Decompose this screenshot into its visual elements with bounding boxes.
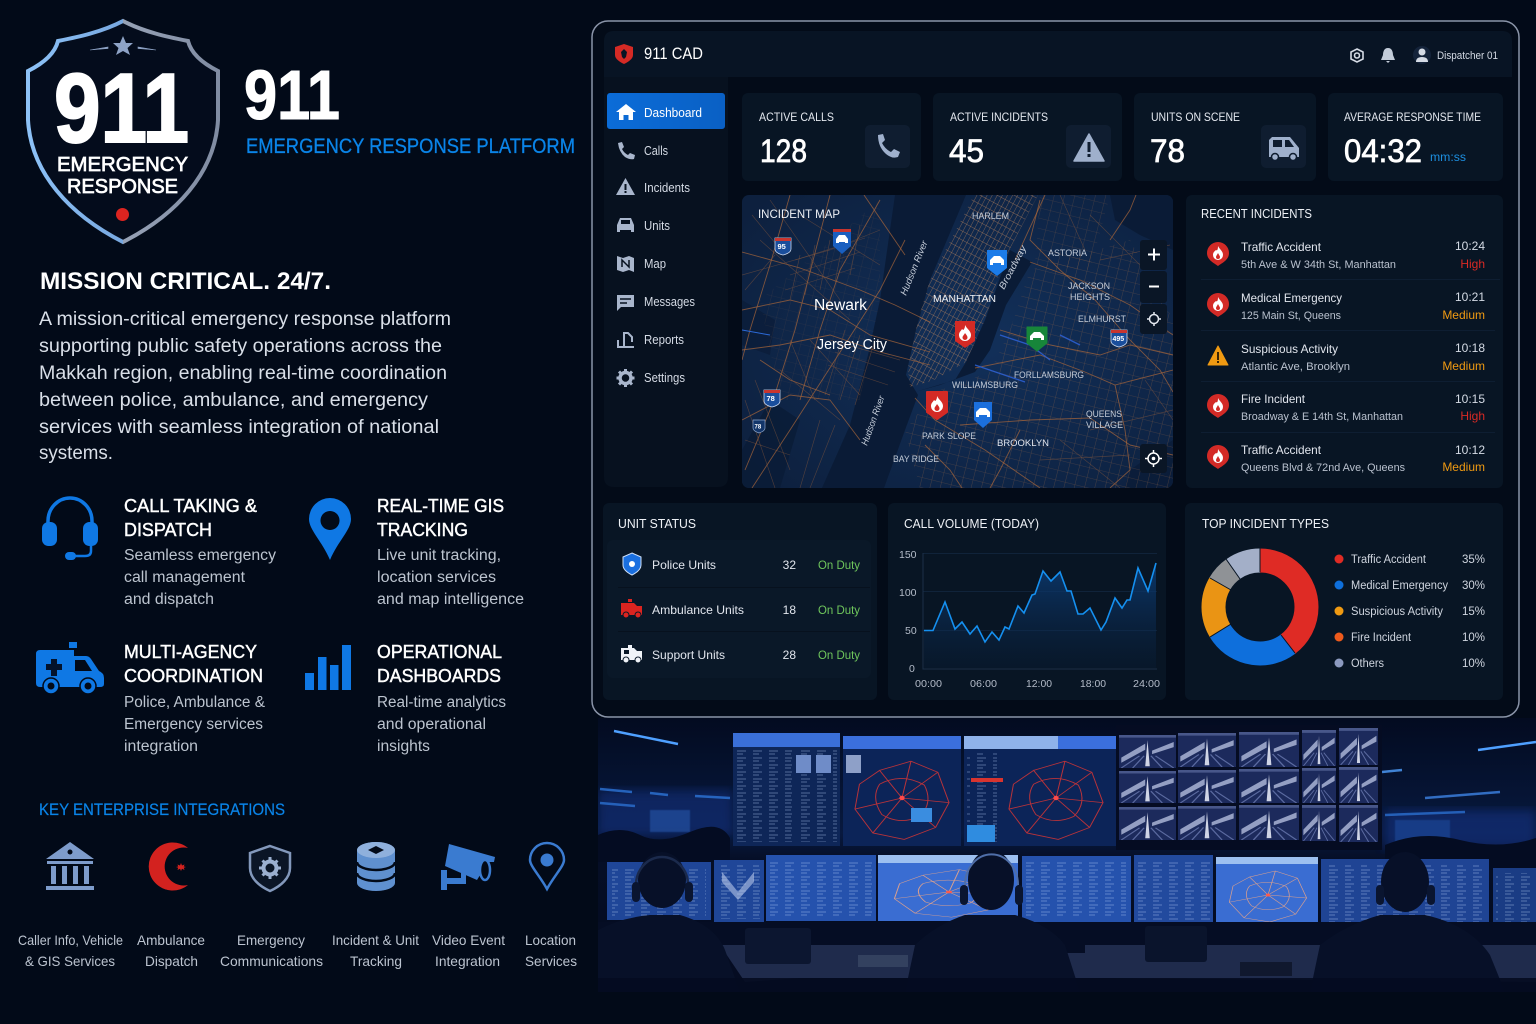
incident row: medical emergency, medium: 125 Main St, Queens (1241, 310, 1341, 322)
incident row: fire incident, high: Broadway & E 14th St, Manhattan (1241, 411, 1403, 423)
logo badge: 911 emergency response shield (28, 21, 218, 242)
mission description text block: systems. (39, 443, 113, 464)
unit row: support: Support Units (652, 648, 725, 662)
map locate button (1140, 444, 1167, 473)
unit row: ambulance (621, 599, 860, 618)
map pin: vehicle blue north (987, 250, 1007, 276)
KPI card: average response time: 04:32 (1344, 133, 1422, 169)
chart axis labels: 100 (899, 587, 917, 599)
dashboard header bar (604, 31, 1512, 77)
map place labels: ELMHURST (1078, 314, 1126, 325)
nav item: dashboard: Dashboard (644, 106, 702, 120)
mission description text block: Makkah region, enabling real-time coordination (39, 363, 447, 384)
unit row: support: On Duty (818, 650, 860, 662)
chart axis labels: 24:00 (1133, 678, 1160, 690)
incident row: fire incident, high: 10:15 (1455, 392, 1485, 406)
map pin: fire red south (927, 392, 947, 419)
map place labels: BROOKLYN (997, 438, 1049, 449)
map pin: police blue (833, 229, 851, 254)
icon: notification bell (1381, 48, 1395, 63)
unit row: police: On Duty (818, 560, 860, 572)
map place labels: Newark (814, 297, 867, 314)
nav item: reports (618, 333, 684, 347)
map place labels: HARLEM (972, 211, 1009, 222)
feature: multi-agency coordination: Emergency services (124, 716, 263, 733)
panel: incident map (742, 195, 1173, 488)
chart area fill (924, 563, 1156, 668)
title: 911: 911 (244, 56, 340, 134)
dashboard header bar: Dispatcher 01 (1437, 50, 1498, 62)
panel: call volume line chart (888, 503, 1166, 700)
mission description text block: supporting public safety operations across the (39, 336, 442, 357)
feature: multi-agency coordination: COORDINATION (124, 666, 263, 686)
feature: operational dashboards (305, 642, 506, 755)
donut legend: Suspicious Activity (1351, 606, 1443, 618)
KPI card: units on scene: 78 (1150, 133, 1185, 169)
KPI card: active incidents: ACTIVE INCIDENTS (950, 110, 1048, 124)
panel: call volume line chart: CALL VOLUME (TODAY) (904, 517, 1039, 531)
incident row: traffic accident, medium: 10:12 (1455, 443, 1485, 457)
map title: INCIDENT MAP (758, 207, 840, 221)
map place labels: ASTORIA (1048, 248, 1088, 259)
incident row: suspicious activity, medium: Atlantic Ave, Brooklyn (1241, 361, 1350, 373)
donut legend: Medical Emergency (1351, 580, 1448, 592)
incident row: fire incident, high: Fire Incident (1241, 392, 1306, 406)
KPI card: units on scene: UNITS ON SCENE (1151, 110, 1240, 124)
integration: video event integration: Video Event (432, 932, 505, 948)
nav item: units (617, 218, 670, 233)
integration: emergency communications: Emergency (237, 932, 305, 948)
KPI card: average response time (1328, 93, 1503, 181)
donut legend (1334, 554, 1485, 670)
map place labels: FORLLAMSBURG (1014, 370, 1084, 381)
feature: multi-agency coordination: Police, Ambulance & (124, 694, 266, 711)
nav item: map: Map (644, 257, 666, 271)
chart axis labels: 50 (905, 625, 917, 637)
map city grids (760, 195, 1173, 488)
KPI card: units on scene (1134, 93, 1316, 181)
unit row: police: Police Units (652, 558, 716, 572)
icon: red crescent (149, 843, 188, 890)
panel: 911 CAD dashboard (592, 21, 1519, 717)
incident row: suspicious activity, medium (1208, 341, 1485, 373)
heading: mission critical: MISSION CRITICAL. 24/7. (40, 268, 331, 295)
map pin: green unit (1027, 327, 1047, 351)
incident row: medical emergency, medium: Medium (1442, 308, 1485, 322)
map highway shields: 78 (754, 424, 762, 430)
subtitle: emergency response platform: EMERGENCY RESPONSE PLATFORM (246, 135, 575, 158)
incident row: traffic accident, medium: Traffic Accident (1241, 443, 1322, 457)
integration: caller info, vehicle and GIS services: Caller Info, Vehicle (18, 932, 123, 948)
feature: call taking and dispatch: DISPATCH (124, 520, 212, 540)
KPI card: active calls: ACTIVE CALLS (759, 110, 834, 124)
nav item: settings (616, 369, 685, 387)
integration: video event integration (432, 844, 505, 969)
icon: red shield logo (615, 44, 633, 64)
operator: left (623, 856, 727, 955)
chart axis labels: 06:00 (970, 678, 997, 690)
KPI card: active calls (742, 93, 921, 181)
incident row: suspicious activity, medium: Suspicious Activity (1241, 342, 1338, 356)
logo badge: 911 emergency response shield: RESPONSE (67, 176, 178, 198)
unit row: ambulance: 18 (783, 603, 796, 617)
feature: multi-agency coordination: MULTI-AGENCY (124, 642, 257, 662)
map place labels: JACKSON (1068, 281, 1110, 292)
feature: real-time GIS tracking: and map intelligence (377, 591, 524, 608)
icon: dispatcher avatar (1413, 46, 1431, 64)
KPI card: average response time: AVERAGE RESPONSE TIME (1344, 110, 1481, 124)
panel: unit status: UNIT STATUS (618, 517, 696, 531)
icon: shield with gear (250, 846, 290, 891)
map pin: vehicle blue south (974, 402, 992, 428)
incident row: traffic accident, medium (1207, 443, 1485, 474)
incident row: traffic accident, medium: Queens Blvd & 72nd Ave, Queens (1241, 462, 1405, 474)
mission description text block: services with seamless integration of national (39, 417, 439, 438)
KPI card: active incidents (933, 93, 1122, 181)
feature: real-time GIS tracking: Live unit tracking, (377, 547, 501, 564)
chart axis labels: 0 (909, 663, 915, 675)
map zoom controls (1140, 240, 1167, 334)
feature: real-time GIS tracking: REAL-TIME GIS (377, 496, 504, 516)
map place labels: Broadway (997, 243, 1030, 291)
desk monitors (607, 855, 1536, 922)
feature: multi-agency coordination: integration (124, 738, 198, 755)
icon: ambulance (36, 642, 104, 694)
unit row: police (623, 553, 860, 575)
incident row: fire incident, high: High (1460, 409, 1485, 423)
feature: operational dashboards: insights (377, 738, 430, 755)
operator: right (1313, 859, 1500, 978)
integration: emergency communications (220, 846, 323, 969)
nav item: units: Units (644, 219, 670, 233)
chart axis labels (899, 549, 1160, 690)
map place labels: HEIGHTS (1070, 292, 1110, 303)
feature: operational dashboards: DASHBOARDS (377, 666, 501, 686)
chart axis labels: 150 (899, 549, 917, 561)
incident row: fire incident, high (1207, 392, 1485, 423)
mission description text block (39, 309, 451, 464)
photo: control room with video wall and operators (598, 718, 1536, 992)
mission description text block: A mission-critical emergency response platform (39, 309, 451, 330)
feature: real-time GIS tracking: location services (377, 569, 496, 586)
map highway shields: 495 (1112, 336, 1124, 343)
integration: caller info, vehicle and GIS services: & GIS Services (25, 953, 115, 969)
donut legend: 15% (1462, 606, 1485, 618)
incident row: traffic accident, high: 5th Ave & W 34th St, Manhattan (1241, 259, 1396, 271)
unit row: support (621, 645, 860, 663)
incident row: traffic accident, high (1207, 239, 1485, 271)
feature: operational dashboards: Real-time analytics (377, 694, 506, 711)
feature: real-time GIS tracking (309, 496, 524, 608)
map place labels (814, 211, 1126, 465)
donut legend: 35% (1462, 554, 1485, 566)
integration: caller info, vehicle and GIS services (18, 842, 123, 969)
integration: location services (525, 843, 577, 969)
nav item: messages (617, 295, 695, 311)
incident row: suspicious activity, medium: Medium (1442, 359, 1485, 373)
incident row: medical emergency, medium: Medical Emergency (1241, 291, 1342, 305)
icon: map pin (309, 498, 351, 560)
feature: real-time GIS tracking: TRACKING (377, 520, 468, 540)
feature: call taking and dispatch: Seamless emergency (124, 547, 276, 564)
icon: outline location pin (530, 843, 564, 889)
map highway shields: 95 (778, 242, 786, 251)
feature: call taking and dispatch: and dispatch (124, 591, 214, 608)
unit row: police: 32 (783, 558, 796, 572)
feature: operational dashboards: OPERATIONAL (377, 642, 502, 662)
incident row: traffic accident, medium: Medium (1442, 460, 1485, 474)
nav item: calls (618, 142, 668, 159)
donut legend: Traffic Accident (1351, 554, 1427, 566)
nav item: dashboard (607, 93, 725, 129)
feature: call taking and dispatch: call management (124, 569, 246, 586)
nav item: reports: Reports (644, 333, 684, 347)
map place labels: WILLIAMSBURG (952, 380, 1018, 391)
desk and equipment (722, 922, 1536, 978)
donut legend: 10% (1462, 632, 1485, 644)
video wall: camera feeds (1116, 725, 1382, 850)
donut legend: Fire Incident (1351, 632, 1412, 644)
map place labels: Hudson River (899, 238, 931, 297)
map place labels: VILLAGE (1086, 420, 1123, 431)
KPI card: active incidents: 45 (949, 133, 984, 169)
nav item: map (617, 256, 666, 272)
map place labels: PARK SLOPE (922, 431, 976, 442)
feature: operational dashboards: and operational (377, 716, 486, 733)
map place labels: Hudson River (859, 394, 888, 447)
panel: recent incidents: RECENT INCIDENTS (1201, 207, 1312, 221)
heading: key enterprise integrations: KEY ENTERPRISE INTEGRATIONS (39, 801, 285, 819)
unit row: support: 28 (783, 648, 796, 662)
sidebar navigation (604, 77, 728, 487)
map place labels: QUEENS (1086, 409, 1122, 420)
operator: center (908, 853, 1076, 978)
icon: settings badge (1351, 49, 1363, 62)
donut legend: 30% (1462, 580, 1485, 592)
nav item: calls: Calls (644, 144, 668, 158)
map pin: fire red north (955, 321, 975, 348)
donut chart (1195, 542, 1325, 672)
logo badge: 911 emergency response shield: 911 (54, 53, 189, 163)
map place labels: Jersey City (817, 337, 888, 353)
KPI card: active calls: 128 (760, 133, 807, 169)
background office lights (598, 731, 1536, 870)
incident row: medical emergency, medium: 10:21 (1455, 290, 1485, 304)
dashboard header bar: 911 CAD (644, 45, 703, 63)
integration: ambulance dispatch: Dispatch (145, 953, 198, 969)
logo badge: 911 emergency response shield: EMERGENCY (57, 154, 188, 176)
KPI card: average response time: mm:ss (1430, 150, 1466, 164)
map water (742, 195, 1173, 488)
incident row: traffic accident, high: 10:24 (1455, 239, 1485, 253)
nav item: messages: Messages (644, 295, 695, 309)
integration: incident and unit tracking: Tracking (350, 953, 402, 969)
feature: multi-agency coordination (36, 642, 266, 755)
nav item: incidents: Incidents (644, 181, 690, 195)
integration: emergency communications: Communications (220, 953, 323, 969)
chart axis labels: 18:00 (1080, 678, 1106, 690)
integration: location services: Location (525, 932, 576, 948)
incident row: traffic accident, high: Traffic Accident (1241, 240, 1322, 254)
integration: location services: Services (525, 953, 577, 969)
integration: ambulance dispatch: Ambulance (137, 932, 205, 948)
map roads (742, 195, 1173, 488)
mission description text block: between police, ambulance, and emergency (39, 390, 429, 411)
map highway shields: 78 (766, 394, 775, 403)
integration: video event integration: Integration (435, 953, 500, 969)
icon: headset (42, 498, 98, 560)
chart axis labels: 00:00 (915, 678, 942, 690)
chart axis labels: 12:00 (1026, 678, 1052, 690)
feature: call taking and dispatch: CALL TAKING & (124, 496, 257, 516)
chart line (924, 563, 1156, 642)
donut legend: 10% (1462, 658, 1485, 670)
panel: top incident types donut chart: TOP INCIDENT TYPES (1202, 517, 1329, 531)
feature: call taking and dispatch (42, 496, 276, 608)
icon: government building (46, 842, 94, 890)
unit row: ambulance: On Duty (818, 605, 860, 617)
map place labels: MANHATTAN (933, 293, 996, 305)
panel: recent incidents (1186, 195, 1503, 488)
unit row: ambulance: Ambulance Units (652, 603, 744, 617)
icon: database (357, 842, 395, 891)
icon: security camera (441, 844, 495, 890)
map place labels: BAY RIDGE (893, 454, 939, 465)
integration: ambulance dispatch (137, 843, 205, 969)
nav item: incidents (616, 178, 690, 195)
incident row: traffic accident, high: High (1460, 257, 1485, 271)
panel: unit status (603, 503, 877, 700)
integration: incident and unit tracking (332, 842, 419, 969)
icon: bar chart (305, 645, 351, 690)
incident row: suspicious activity, medium: 10:18 (1455, 341, 1485, 355)
map highway shields (753, 238, 1127, 433)
video wall: dashboard screens (733, 733, 1116, 846)
incident row: medical emergency, medium (1207, 290, 1485, 322)
donut legend: Others (1351, 658, 1384, 670)
nav item: settings: Settings (644, 371, 685, 385)
integration: incident and unit tracking: Incident & Unit (332, 932, 419, 948)
panel: top incident types donut chart (1185, 503, 1503, 700)
